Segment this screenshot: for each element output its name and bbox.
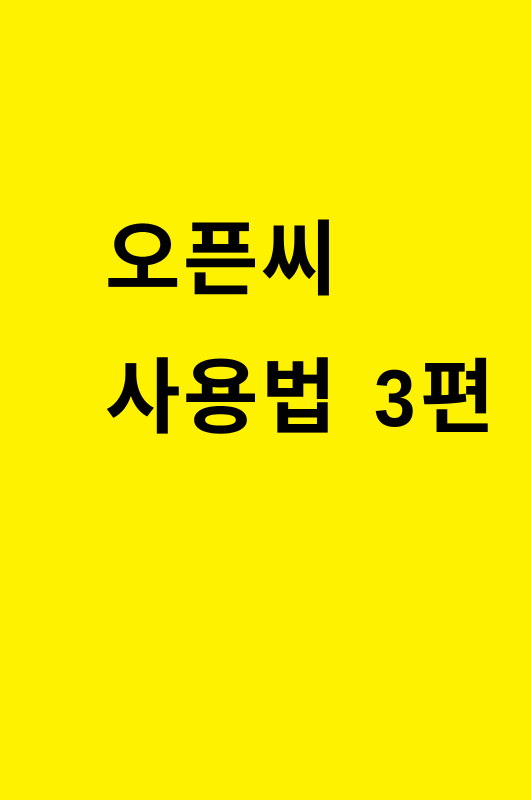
title line 1: 오픈씨 <box>105 215 339 306</box>
title line 2 <box>105 353 495 444</box>
title line 2: 3 <box>374 354 415 444</box>
title line 2: 사용법 <box>105 353 339 444</box>
title line 2: 편 <box>420 354 495 444</box>
